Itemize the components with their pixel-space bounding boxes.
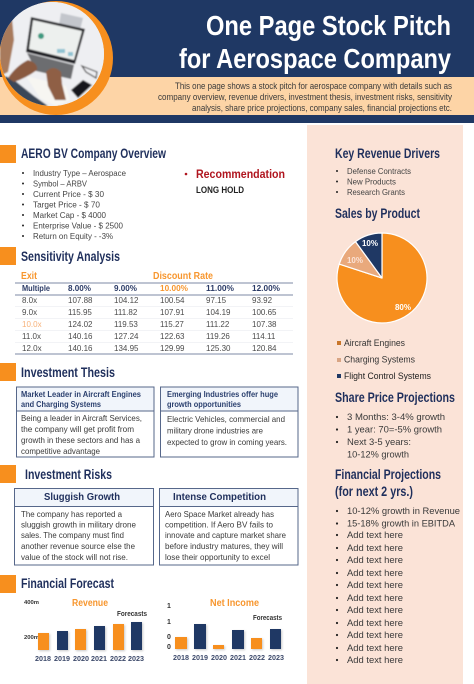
revenue bar chart: 2022 bbox=[110, 654, 126, 663]
revenue bar chart: 2019 bbox=[54, 654, 70, 663]
net income bar chart: Forecasts bbox=[253, 615, 282, 622]
revenue bar chart: 2023 bbox=[128, 654, 144, 663]
sidebar: sales by product: Sales by Product bbox=[335, 206, 420, 221]
sensitivity table: Exit bbox=[21, 271, 38, 282]
risk card: sluggish growth: value of the stock will not rise. bbox=[21, 552, 128, 562]
pie chart bbox=[337, 233, 427, 323]
sensitivity table: 114.11 bbox=[252, 332, 276, 341]
sensitivity table: 115.95 bbox=[68, 308, 92, 317]
sidebar: financial projections bbox=[335, 467, 460, 665]
sidebar: financial projections: Financial Projections bbox=[335, 467, 441, 482]
sidebar: share price projections bbox=[335, 390, 455, 460]
net income bar chart: 2019 bbox=[192, 653, 208, 662]
sensitivity table: 124.02 bbox=[68, 320, 93, 329]
pie legend: Flight Control Systems bbox=[344, 371, 431, 381]
overview list: Symbol – ARBV bbox=[33, 178, 87, 188]
revenue bar chart bbox=[24, 598, 147, 663]
marker bbox=[0, 247, 16, 265]
marker bbox=[0, 465, 16, 483]
recommendation: LONG HOLD bbox=[196, 185, 244, 195]
risk card: sluggish growth: another revenue source else the bbox=[21, 541, 135, 551]
overview list: Return on Equity - -3% bbox=[33, 231, 113, 241]
header banner bbox=[0, 0, 474, 123]
sensitivity table: 10.00% bbox=[160, 283, 188, 293]
sidebar: key revenue drivers: New Products bbox=[347, 176, 396, 186]
thesis card: market leader: competitive advantage bbox=[21, 446, 100, 456]
risk card: intense competition: lose their opportunity to excel bbox=[165, 552, 270, 562]
intro text: company overview, revenue drivers, investment thesis, investment risks, sensitivity bbox=[158, 92, 453, 102]
sidebar: share price projections: 1 year: 70=-5% growth bbox=[347, 424, 442, 434]
sensitivity table: 111.22 bbox=[206, 320, 230, 329]
sidebar: key revenue drivers bbox=[335, 146, 440, 197]
risk card: sluggish growth: sales. The company must find bbox=[21, 530, 124, 540]
right side panel bbox=[307, 125, 463, 684]
thesis card: market leader: and Charging Systems bbox=[21, 400, 102, 409]
revenue bar chart: 2018 bbox=[35, 654, 51, 663]
title bbox=[179, 10, 451, 74]
sidebar: financial projections: Add text here bbox=[347, 592, 403, 603]
sensitivity table: 100.54 bbox=[160, 296, 185, 305]
heading: Financial Forecast bbox=[21, 576, 114, 591]
risk card: sluggish growth: sluggish growth in military drone bbox=[21, 520, 136, 530]
sidebar: key revenue drivers: Defense Contracts bbox=[347, 166, 411, 176]
sidebar: financial projections: Add text here bbox=[347, 629, 403, 640]
sensitivity table: 104.19 bbox=[206, 308, 231, 317]
revenue bar chart: 200m bbox=[24, 635, 39, 641]
overview list: Current Price - $ 30 bbox=[33, 189, 104, 199]
pie legend: Aircraft Engines bbox=[344, 338, 405, 348]
sensitivity table bbox=[15, 271, 293, 354]
sidebar: key revenue drivers: Research Grants bbox=[347, 187, 405, 197]
risk card: intense competition: Aero Space Market already has bbox=[165, 509, 274, 519]
net income bar chart: 2020 bbox=[211, 653, 227, 662]
thesis card: market leader: Market Leader in Aircraft Engines bbox=[21, 390, 142, 399]
net income bar chart: 0 bbox=[167, 644, 171, 651]
revenue bar chart: Forecasts bbox=[117, 611, 147, 618]
sidebar: financial projections: Add text here bbox=[347, 529, 403, 540]
revenue bar chart: 2021 bbox=[91, 654, 107, 663]
net income bar chart: 2022 bbox=[249, 653, 265, 662]
pie legend: Charging Systems bbox=[344, 354, 415, 364]
sensitivity table: 10.0x bbox=[22, 320, 42, 329]
sensitivity table: 12.00% bbox=[252, 283, 280, 293]
thesis card: market leader: growth in these sectors and has a bbox=[21, 435, 140, 445]
sensitivity table: 8.00% bbox=[68, 283, 91, 293]
sensitivity table: 134.95 bbox=[114, 344, 139, 353]
sensitivity table: 127.24 bbox=[114, 332, 139, 341]
sensitivity table: 129.99 bbox=[160, 344, 185, 353]
sensitivity table: 119.53 bbox=[114, 320, 138, 329]
section: company overview bbox=[0, 145, 285, 241]
sidebar: financial projections: Add text here bbox=[347, 604, 403, 615]
section: financial forecast bbox=[0, 575, 284, 663]
risk card: sluggish growth: The company has reported a bbox=[21, 509, 122, 519]
revenue bar chart: Revenue bbox=[72, 598, 108, 609]
marker bbox=[0, 145, 16, 163]
net income bar chart: 2021 bbox=[230, 653, 246, 662]
sensitivity table: 119.26 bbox=[206, 332, 230, 341]
sensitivity table: Discount Rate bbox=[153, 271, 213, 282]
sidebar: share price projections: Next 3-5 years: bbox=[347, 436, 411, 447]
thesis card: market leader bbox=[16, 387, 154, 457]
net income bar chart bbox=[167, 598, 284, 662]
heading: Investment Thesis bbox=[21, 365, 115, 380]
sensitivity table: Multiple bbox=[22, 283, 50, 293]
pie chart: 80% bbox=[395, 303, 411, 312]
overview list: Industry Type – Aerospace bbox=[33, 168, 126, 178]
overview list: Market Cap - $ 4000 bbox=[33, 210, 106, 220]
pie legend bbox=[337, 338, 431, 381]
sensitivity table: 107.91 bbox=[160, 308, 185, 317]
revenue bar chart: 2020 bbox=[73, 654, 89, 663]
net income bar chart: 2023 bbox=[268, 653, 284, 662]
intro text: This one page shows a stock pitch for aerospace company with details such as bbox=[175, 81, 453, 91]
sensitivity table: 9.0x bbox=[22, 308, 37, 317]
sidebar: financial projections: Add text here bbox=[347, 654, 403, 665]
overview list: Enterprise Value - $ 2500 bbox=[33, 220, 123, 230]
sensitivity table: 9.00% bbox=[114, 283, 137, 293]
net income bar chart: 2018 bbox=[173, 653, 189, 662]
section: investment risks bbox=[0, 465, 298, 565]
thesis card: emerging industries: Emerging Industries offer huge bbox=[167, 390, 279, 399]
sidebar: financial projections: Add text here bbox=[347, 579, 403, 590]
sidebar: share price projections: 3 Months: 3-4% growth bbox=[347, 411, 445, 422]
thesis card: emerging industries: military drone industries are bbox=[167, 426, 263, 436]
sensitivity table: 100.65 bbox=[252, 308, 277, 317]
sidebar: financial projections: 10-12% growth in Revenue bbox=[347, 505, 460, 516]
risk card: sluggish growth bbox=[14, 488, 154, 565]
risk card: intense competition: Intense Competition bbox=[173, 492, 266, 503]
marker bbox=[0, 363, 16, 381]
overview list bbox=[22, 168, 126, 241]
heading: AERO BV Company Overview bbox=[21, 146, 166, 161]
sidebar: financial projections: (for next 2 yrs.) bbox=[335, 484, 413, 499]
heading: Investment Risks bbox=[25, 467, 112, 482]
sensitivity table: 12.0x bbox=[22, 344, 42, 353]
sensitivity table: 122.63 bbox=[160, 332, 185, 341]
sensitivity table: 140.16 bbox=[68, 344, 93, 353]
risk card: intense competition bbox=[160, 488, 298, 565]
overview list: Target Price - $ 70 bbox=[33, 200, 100, 210]
heading: Sensitivity Analysis bbox=[21, 249, 120, 264]
thesis card: emerging industries: growth opportunities bbox=[167, 400, 241, 409]
section: investment thesis bbox=[0, 363, 298, 457]
sidebar: key revenue drivers: Key Revenue Drivers bbox=[335, 146, 440, 161]
thesis card: emerging industries bbox=[160, 387, 298, 457]
thesis card: emerging industries: expected to grow in coming years. bbox=[167, 437, 287, 447]
sensitivity table: 111.82 bbox=[114, 308, 138, 317]
sidebar: financial projections: Add text here bbox=[347, 542, 403, 553]
sensitivity table: 115.27 bbox=[160, 320, 184, 329]
sensitivity table: 11.00% bbox=[206, 283, 234, 293]
risk card: intense competition: competition. If Aero BV fails to bbox=[165, 520, 273, 530]
thesis card: market leader: the company will get profit from bbox=[21, 424, 134, 434]
intro text bbox=[158, 81, 453, 113]
pie chart: 10% bbox=[347, 256, 363, 265]
intro text: analysis, share price projections, company sales, financial projections etc. bbox=[192, 103, 452, 113]
sensitivity table: 97.15 bbox=[206, 296, 227, 305]
sensitivity table: 140.16 bbox=[68, 332, 93, 341]
sensitivity table: 8.0x bbox=[22, 296, 37, 305]
pie chart: 10% bbox=[362, 239, 378, 248]
recommendation: Recommendation bbox=[196, 167, 285, 181]
sidebar: financial projections: 15-18% growth in EBITDA bbox=[347, 518, 456, 528]
sidebar: financial projections: Add text here bbox=[347, 642, 403, 653]
net income bar chart: 0 bbox=[167, 634, 171, 641]
net income bar chart: Net Income bbox=[210, 598, 259, 609]
sidebar: financial projections: Add text here bbox=[347, 617, 403, 628]
marker bbox=[0, 575, 16, 593]
net income bar chart: 1 bbox=[167, 619, 171, 626]
sidebar: share price projections: 10-12% growth bbox=[347, 448, 409, 460]
sensitivity table: 120.84 bbox=[252, 344, 277, 353]
sidebar: sales by product bbox=[335, 206, 431, 381]
thesis card: emerging industries: Electric Vehicles, commercial and bbox=[167, 414, 285, 424]
sensitivity table: 93.92 bbox=[252, 296, 273, 305]
net income bar chart: 1 bbox=[167, 603, 171, 610]
risk card: intense competition: before industry matures, they will bbox=[165, 541, 283, 551]
sensitivity table: 104.12 bbox=[114, 296, 139, 305]
photo: laptop in orange ring bbox=[0, 0, 113, 115]
sidebar: financial projections: Add text here bbox=[347, 554, 403, 565]
sensitivity table: 11.0x bbox=[22, 332, 41, 341]
sensitivity table: 125.30 bbox=[206, 344, 231, 353]
risk card: intense competition: innovate and capture market share bbox=[165, 530, 286, 540]
sidebar: financial projections: Add text here bbox=[347, 567, 403, 578]
thesis card: market leader: Being a leader in Aircraft Services, bbox=[21, 413, 142, 423]
sensitivity table: 107.88 bbox=[68, 296, 93, 305]
recommendation bbox=[185, 167, 285, 195]
revenue bar chart: 400m bbox=[24, 600, 39, 606]
sensitivity table: 107.38 bbox=[252, 320, 277, 329]
risk card: sluggish growth: Sluggish Growth bbox=[44, 492, 120, 503]
section: sensitivity analysis bbox=[0, 247, 293, 354]
